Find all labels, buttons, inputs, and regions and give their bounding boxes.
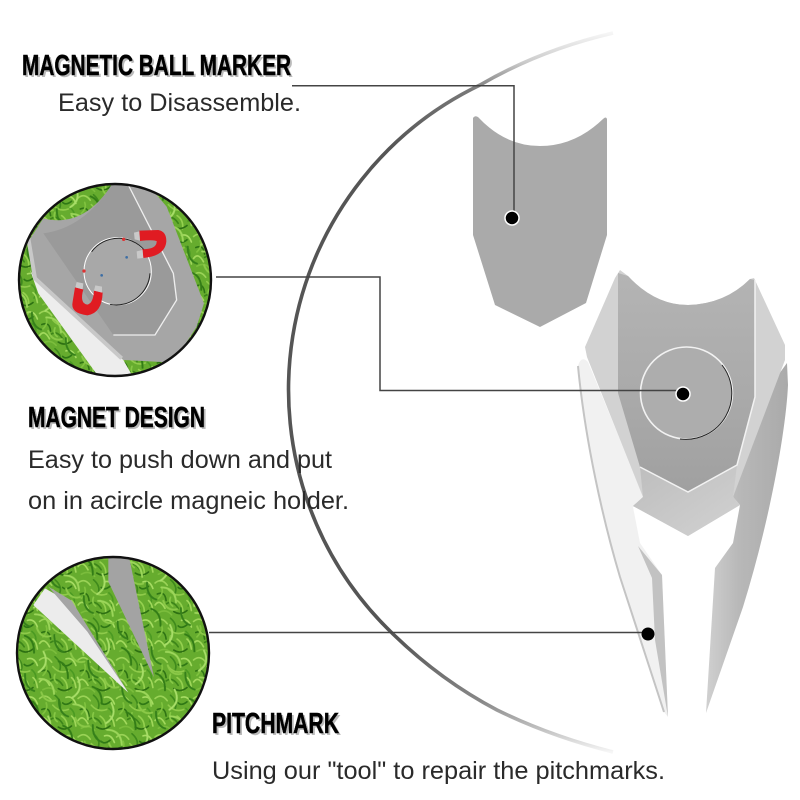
detail circle: pitchmark [17,553,209,749]
heading: magnetic ball marker: MAGNETIC BALL MARKER [22,50,291,82]
tool: head body [585,270,785,536]
zoomed tool [28,183,204,383]
product: divot tool [578,270,788,717]
text: pitchmark description: Using our "tool" to repair the pitchmarks. [212,757,665,785]
heading: pitchmark: PITCHMARK [212,708,339,740]
tool: magnet ring [640,347,732,439]
leader dot: pitchmark [642,628,654,640]
leader line: pitchmark [209,632,645,634]
heading: pitchmark: PITCHMARK [214,710,341,742]
leader line: magnet [216,277,683,390]
text: magnet description: on in acircle magneic holder. [28,487,349,515]
zoomed tines [33,553,154,693]
heading: magnet design: MAGNET DESIGN [30,404,207,436]
tool: white left blade [578,359,668,717]
leader dot: ball marker [505,211,519,225]
text: magnet description: Easy to push down and put [28,446,332,474]
grass background [17,557,209,749]
tool: ring shadow [680,365,732,439]
tool: inner panel [618,273,755,492]
circle outline [19,184,211,376]
heading: magnet design [28,402,207,436]
icon: upper magnet [134,230,166,259]
text: easy to disassemble: Easy to Disassemble. [58,89,301,117]
heading: magnetic ball marker [22,50,293,84]
tool: right blade [706,363,788,713]
tool: panel highlight [640,280,755,492]
leader line: ball marker [292,86,514,218]
tool: chevron lower band [633,465,740,536]
heading: magnet design: MAGNET DESIGN [28,402,205,434]
leader dot: magnet [676,387,690,401]
detail circle: magnets [19,183,211,383]
heading: magnetic ball marker: MAGNETIC BALL MARKER [24,52,293,84]
icon: lower magnet [72,282,103,315]
circle outline [17,557,209,749]
product: ball marker [473,116,607,327]
text: magnet description [28,446,349,515]
large circular arc [289,33,613,752]
tool: left blade outer edge [578,366,664,712]
tool: left tine facet [638,546,668,717]
grass background [19,184,211,376]
